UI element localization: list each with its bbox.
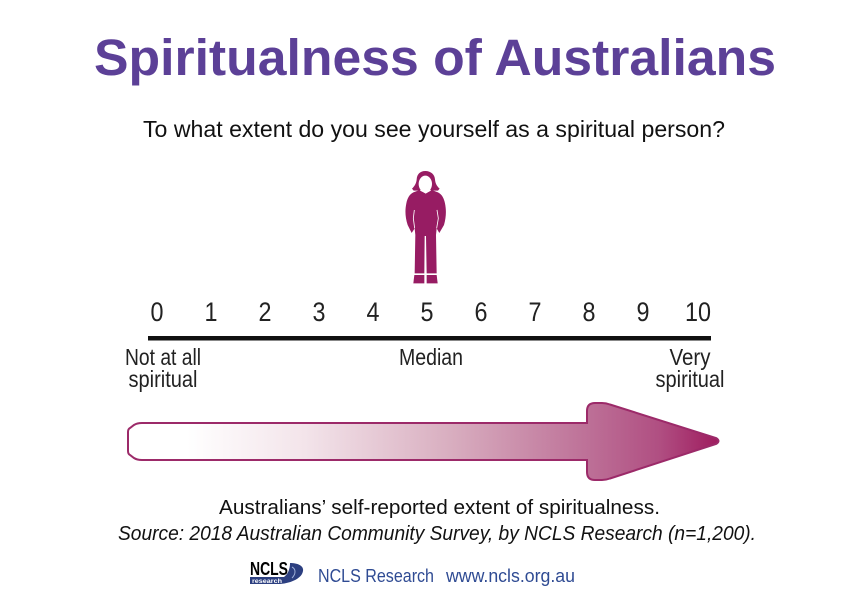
scale numbers: 10 (685, 297, 711, 327)
label: not at all spiritual (125, 344, 201, 392)
title: Spiritualness of Australians (94, 29, 776, 86)
logo: NCLS research: research (252, 578, 282, 585)
icon: woman at median (405, 171, 446, 283)
footer: website: www.ncls.org.au (445, 566, 575, 586)
label: median: Median (399, 344, 463, 370)
scale numbers: 6 (474, 297, 488, 327)
scale numbers: 3 (312, 297, 326, 327)
scale numbers: 7 (528, 297, 542, 327)
scale numbers (150, 297, 711, 327)
scale numbers: 4 (366, 297, 380, 327)
label: not at all spiritual: Not at all (125, 344, 201, 370)
logo: NCLS research: NCLS (250, 558, 288, 579)
footer: organisation: NCLS Research (318, 566, 434, 586)
label: not at all spiritual: spiritual (128, 366, 198, 392)
scale line (148, 336, 711, 340)
scale numbers: 1 (204, 297, 218, 327)
scale numbers: 9 (636, 297, 650, 327)
label: very spiritual: Very (670, 344, 711, 370)
scale numbers: 5 (420, 297, 434, 327)
label: very spiritual: spiritual (656, 366, 724, 392)
source: Source: 2018 Australian Community Survey, by NCLS Research (n=1,200). (118, 522, 756, 545)
label: very spiritual (656, 344, 724, 392)
scale numbers: 0 (150, 297, 164, 327)
question: To what extent do you see yourself as a spiritual person? (143, 116, 725, 142)
caption: Australians’ self-reported extent of spiritualness. (219, 496, 660, 519)
scale numbers: 2 (258, 297, 272, 327)
scale numbers: 8 (582, 297, 596, 327)
gradient arrow (128, 403, 718, 480)
